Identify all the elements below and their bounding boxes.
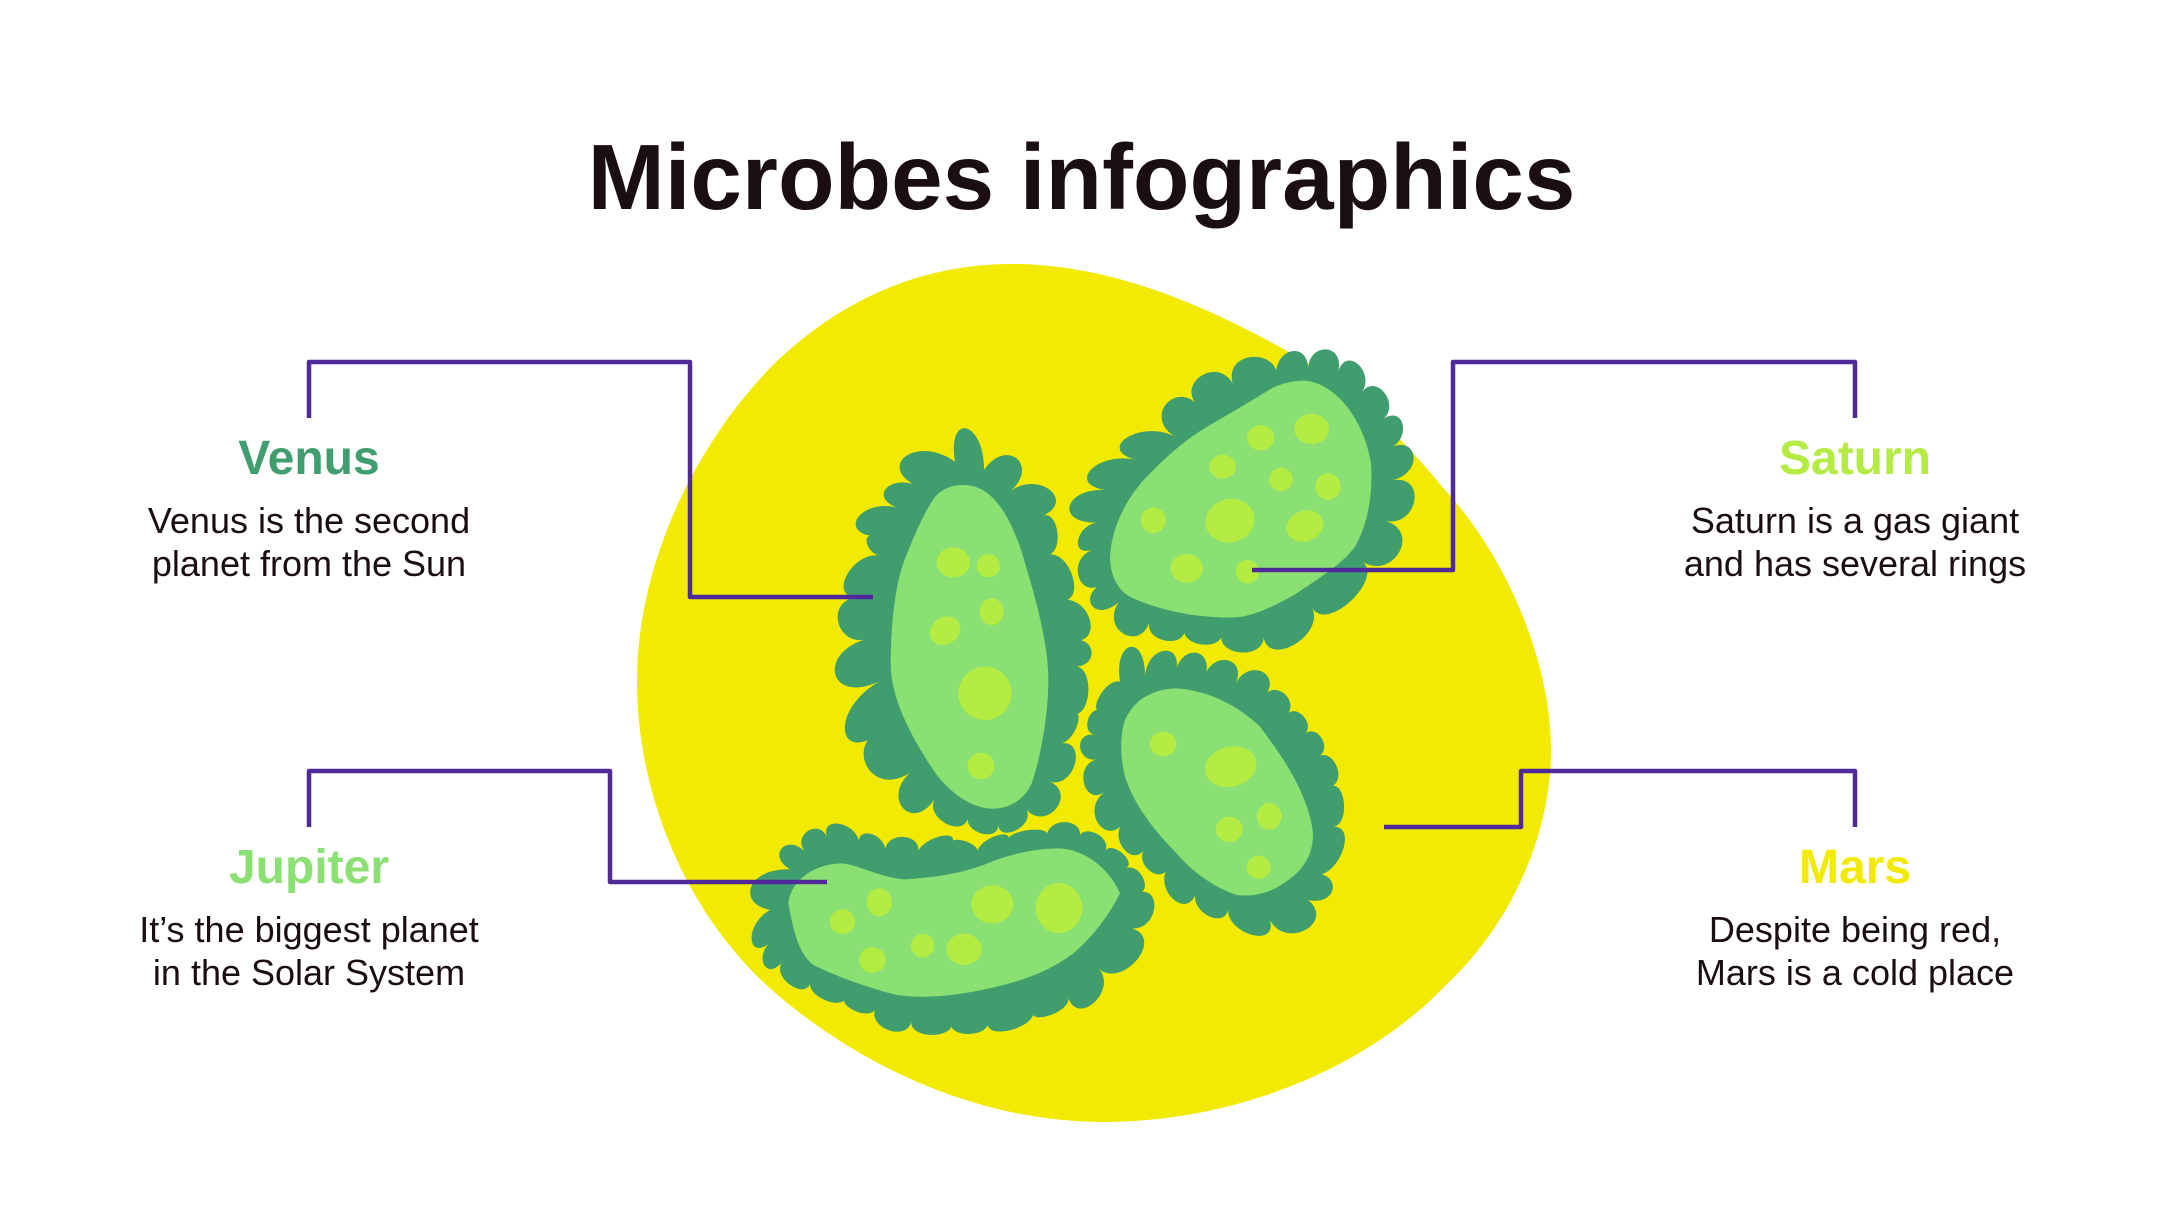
description: Jupiter: in the Solar System — [153, 952, 465, 993]
connector: Saturn — [1252, 362, 1855, 570]
description: Saturn: Saturn is a gas giant — [1691, 500, 2019, 541]
description: Mars: Despite being red, — [1709, 909, 2001, 950]
microbe: Saturn — [1069, 349, 1415, 653]
connector: Venus — [309, 362, 873, 597]
connector: Mars — [1384, 771, 1855, 827]
description: Venus: planet from the Sun — [152, 543, 466, 584]
description: Saturn: and has several rings — [1684, 543, 2026, 584]
text block: Venus — [148, 432, 470, 584]
description: Jupiter: It’s the biggest planet — [139, 909, 479, 950]
heading: Mars: Mars — [1799, 841, 1911, 894]
yellow background blob — [637, 264, 1551, 1122]
heading: Jupiter: Jupiter — [229, 841, 389, 894]
text block: Mars — [1696, 841, 2014, 993]
description: Mars: Mars is a cold place — [1696, 952, 2014, 993]
connector: Jupiter — [309, 771, 827, 882]
title: Microbes infographics — [588, 125, 1575, 229]
text block: Saturn — [1684, 432, 2026, 584]
microbe: Venus — [835, 428, 1092, 834]
microbe: Mars — [1080, 647, 1345, 936]
text block: Jupiter — [139, 841, 479, 993]
microbe: Jupiter — [750, 822, 1154, 1035]
heading: Venus: Venus — [238, 432, 380, 485]
heading: Saturn: Saturn — [1779, 432, 1931, 485]
description: Venus: Venus is the second — [148, 500, 470, 541]
